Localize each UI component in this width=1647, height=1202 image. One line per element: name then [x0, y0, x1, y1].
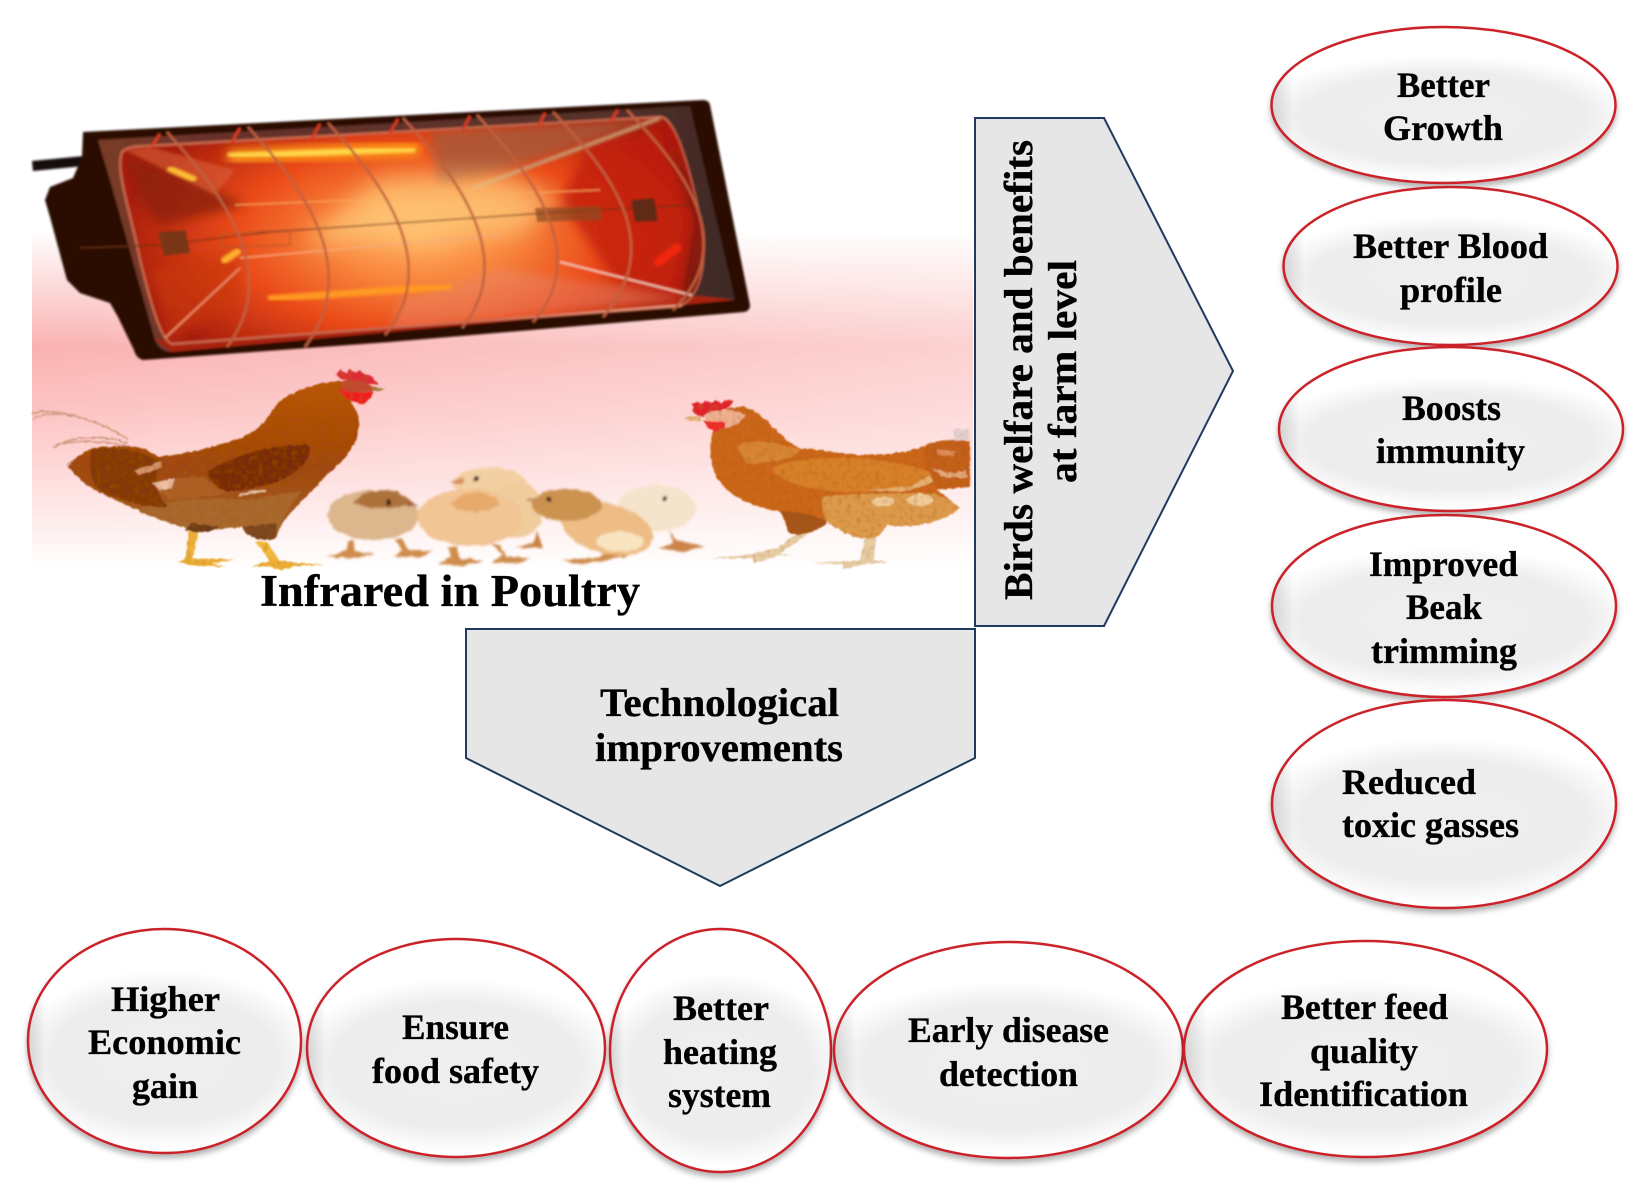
heading: infrared in poultry: Infrared in Poultry	[260, 566, 641, 616]
arrow: technological improvements: Technological	[600, 680, 839, 725]
oval: reduced toxic gasses	[1272, 700, 1616, 908]
chick back	[450, 467, 558, 550]
oval: better feed quality identification: quality	[1310, 1031, 1418, 1071]
oval: better growth: Better	[1397, 65, 1490, 105]
illustration: chicks	[327, 467, 705, 566]
oval: ensure food safety	[307, 939, 605, 1157]
chick right pale	[617, 485, 705, 552]
heater tube	[80, 190, 690, 258]
oval: improved beak trimming: Beak	[1406, 587, 1482, 627]
oval: boosts immunity	[1279, 347, 1623, 511]
oval: early disease detection: detection	[939, 1054, 1078, 1094]
oval: boosts immunity: immunity	[1376, 431, 1525, 471]
guard clips	[152, 110, 618, 146]
oval: better heating system	[610, 929, 831, 1172]
oval: early disease detection: Early disease	[908, 1010, 1109, 1050]
oval: higher economic gain: Economic	[88, 1022, 241, 1062]
panel: infrared poultry illustration	[32, 100, 973, 571]
oval: better feed quality identification: Better feed	[1281, 987, 1448, 1027]
oval: better heating system: system	[668, 1075, 771, 1115]
oval: better growth	[1272, 27, 1616, 183]
pink infrared glow	[32, 170, 973, 570]
oval: early disease detection	[834, 942, 1183, 1158]
arrow: technological improvements	[466, 629, 975, 886]
oval: improved beak trimming: trimming	[1371, 631, 1517, 671]
illustration: hen	[684, 400, 970, 570]
wire guard	[167, 110, 704, 347]
oval: higher economic gain: gain	[132, 1066, 198, 1106]
oval: better heating system: heating	[663, 1032, 777, 1072]
illustration: rooster	[32, 369, 386, 571]
arrow: birds welfare and benefits	[975, 118, 1233, 626]
oval: reduced toxic gasses: Reduced	[1342, 762, 1476, 802]
oval: improved beak trimming: Improved	[1369, 544, 1518, 584]
oval: higher economic gain: Higher	[111, 979, 220, 1019]
oval: improved beak trimming	[1272, 515, 1616, 697]
oval: ensure food safety: food safety	[372, 1051, 539, 1091]
oval: better growth: Growth	[1383, 108, 1503, 148]
oval: higher economic gain	[28, 929, 301, 1153]
oval: better feed quality identification: Identification	[1259, 1074, 1468, 1114]
oval: boosts immunity: Boosts	[1402, 388, 1501, 428]
oval: reduced toxic gasses: toxic gasses	[1342, 805, 1519, 845]
oval: better blood profile: profile	[1400, 270, 1502, 310]
chick left	[327, 490, 433, 558]
icon: infrared heater	[32, 100, 750, 360]
chick front centre	[417, 489, 530, 566]
glowing elements	[168, 148, 680, 299]
arrow: birds welfare and benefits: at farm level	[1040, 260, 1085, 483]
oval: better feed quality identification	[1184, 941, 1547, 1157]
oval: better blood profile: Better Blood	[1353, 226, 1548, 266]
oval: better heating system: Better	[673, 988, 769, 1028]
arrow: birds welfare and benefits: Birds welfare and benefits	[996, 140, 1041, 600]
oval: better blood profile	[1284, 187, 1618, 345]
chick front right	[525, 489, 659, 565]
oval: ensure food safety: Ensure	[402, 1007, 509, 1047]
arrow: technological improvements: improvements	[595, 725, 843, 770]
